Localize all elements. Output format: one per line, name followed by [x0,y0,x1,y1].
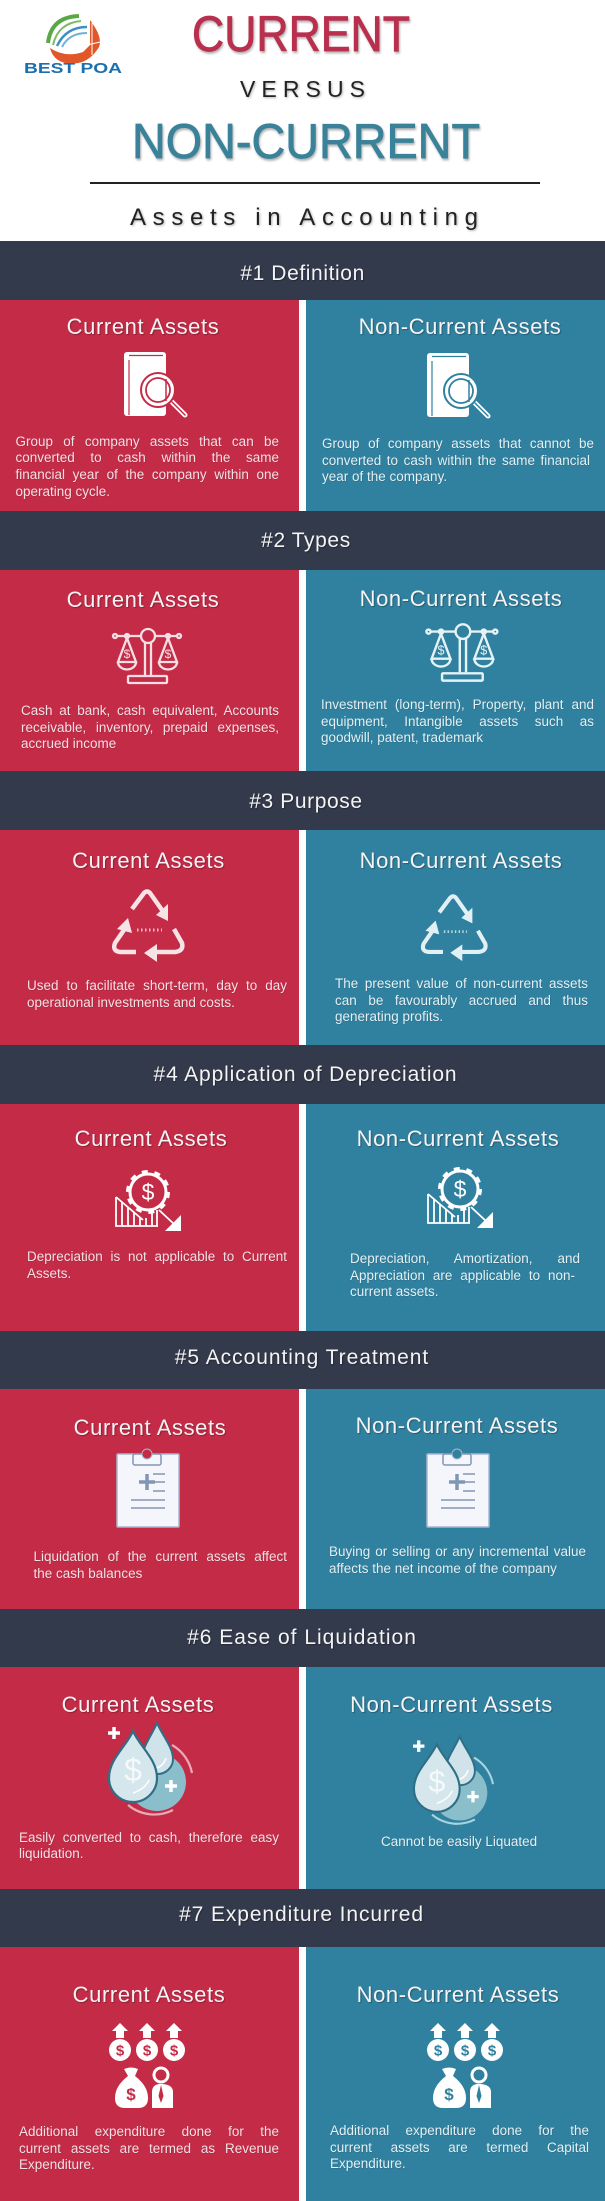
text [27,1249,288,1281]
icon: money bags and investor: $ [126,2085,136,2104]
panel: current assets expenditure [0,1947,299,2201]
text: Cannot be easily Liquated [381,1834,537,1849]
text: operational investments and costs. [27,995,235,1010]
panel: non-current assets expenditure [306,1947,605,2201]
panel: current assets purpose [0,830,299,1045]
text [34,1549,288,1581]
title: versus: VERSUS [240,76,365,102]
text: operating cycle. [16,484,110,499]
heading: Current Assets [67,587,219,612]
text: Appreciation are applicable to non- [350,1268,575,1283]
text: can be favourably accrued and thus [335,993,588,1008]
section bar 5: accounting treatment: #5 Accounting Treatment [175,1346,429,1369]
section bar 6: ease of liquidation [0,1609,605,1667]
text: Liquidation of the current assets affect [34,1549,287,1564]
icon: money bags and investor: $ [170,2042,179,2060]
text [21,703,279,751]
icon: depreciation chart and coin gear: $ [454,1176,467,1202]
text: the cash balances [34,1566,142,1581]
heading: Current Assets [74,1415,226,1440]
icon: scales: $ [480,644,487,658]
text: converted to cash within the same [16,450,279,465]
icon: recycle arrows [112,889,185,962]
text: The present value of non-current assets [335,976,588,991]
panel: non-current assets types [306,570,605,771]
icon: scales [112,628,182,684]
logo: Best POA: BEST POA [24,60,122,77]
text: Expenditure. [19,2157,95,2172]
icon: money bags and investor: $ [434,2042,443,2060]
text: current assets. [350,1284,439,1299]
text: Additional expenditure done for the [330,2123,589,2138]
text [19,1830,280,1862]
icon: money bags and investor: $ [461,2042,470,2060]
heading: Non-Current Assets [350,1692,553,1717]
heading: Current Assets [62,1692,214,1717]
panel: current assets types [0,570,299,771]
panel: non-current assets definition [306,300,605,511]
panel: current assets depreciation [0,1104,299,1331]
heading: Non-Current Assets [360,848,562,873]
text: Investment (long-term), Property, plant and [321,697,594,712]
icon: money bags and investor: $ [488,2042,497,2060]
text: Assets. [27,1266,71,1281]
icon: clipboard [426,1448,490,1528]
icon: money bags and investor [109,2023,185,2108]
text: Expenditure. [330,2156,406,2171]
text [321,697,594,746]
text: Easily converted to cash, therefore easy [19,1830,279,1844]
panel: current assets definition [0,300,299,511]
text [19,2124,279,2172]
title: current: CURRENT [192,6,410,62]
text: goodwill, patent, trademark [321,730,483,745]
section bar 3: purpose [0,771,605,830]
section bar 1: definition [0,241,605,300]
text [335,976,588,1024]
icon: money bags and investor: $ [143,2042,152,2060]
text: Depreciation, Amortization, and [350,1251,580,1266]
panel: non-current assets depreciation [306,1104,605,1331]
text: current assets are termed Capital [330,2140,589,2155]
panel: current assets liquidation [0,1667,299,1889]
heading: Non-Current Assets [359,314,561,339]
text: affects the net income of the company [329,1561,557,1576]
section bar 2: types: #2 Types [261,529,351,552]
header [24,6,540,232]
icon: money drops [413,1734,494,1825]
text: financial year of the company within one [16,467,279,482]
text: receivable, inventory, prepaid expenses, [21,720,279,735]
heading: Non-Current Assets [357,1982,559,2007]
text: Depreciation is not applicable to Current [27,1249,287,1264]
icon: scales: $ [165,647,172,661]
section bar 4: application of depreciation [0,1045,605,1104]
panel: non-current assets accounting treatment [306,1389,605,1609]
icon: depreciation chart and coin gear [427,1167,493,1228]
heading: Non-Current Assets [356,1413,558,1438]
icon: money drops [108,1720,193,1816]
text [330,2123,589,2172]
icon: money drops: $ [124,1752,142,1788]
icon: depreciation chart and coin gear: $ [142,1179,155,1205]
section bar 1: definition: #1 Definition [240,262,365,285]
icon: book and magnifier [427,353,490,418]
icon: money bags and investor: $ [116,2042,125,2060]
text [350,1251,580,1299]
heading: Current Assets [75,1126,227,1151]
section bar 7: expenditure incurred [0,1889,605,1947]
icon: book and magnifier [124,352,188,418]
panel: non-current assets liquidation [306,1667,605,1889]
logo: Best POA [24,16,122,77]
text: Group of company assets that can be [16,434,279,449]
icon: scales: $ [438,644,445,658]
text: Used to facilitate short-term, day to day [27,978,287,993]
text [322,436,594,484]
text: liquidation. [19,1846,84,1861]
heading: Current Assets [72,848,225,873]
text [27,978,288,1010]
panel: non-current assets purpose [306,830,605,1045]
text [16,434,279,500]
text: generating profits. [335,1009,443,1024]
text: accrued income [21,736,116,751]
text: Cash at bank, cash equivalent, Accounts [21,703,279,718]
icon: depreciation chart and coin gear [115,1170,181,1231]
section bar 3: purpose: #3 Purpose [249,790,363,812]
subtitle: Assets in Accounting [130,204,478,231]
icon: scales: $ [124,647,131,661]
section bar 5: accounting treatment [0,1331,605,1389]
text: equipment, Intangible assets such as [321,714,594,729]
heading: Current Assets [73,1982,225,2007]
text [329,1544,586,1576]
section bar 4: application of depreciation: #4 Application of Depreciation [154,1063,457,1086]
heading: Non-Current Assets [360,586,562,611]
icon: money drops: $ [428,1765,445,1799]
icon: scales [425,623,498,682]
text: Additional expenditure done for the [19,2124,279,2139]
text: converted to cash within the same financial [322,453,590,468]
icon: money bags and investor: $ [444,2085,454,2104]
text: current assets are termed as Revenue [19,2141,279,2156]
panel: current assets accounting treatment [0,1389,299,1609]
text: Group of company assets that cannot be [322,436,594,451]
heading: Non-Current Assets [357,1126,559,1151]
title: non-current: NON-CURRENT [132,115,480,169]
section bar 6: ease of liquidation: #6 Ease of Liquidation [187,1626,417,1649]
icon: recycle arrows [420,894,488,961]
icon: money bags and investor [427,2023,503,2108]
heading: Current Assets [67,314,219,339]
icon: clipboard [116,1448,180,1528]
text: year of the company. [322,469,447,484]
section bar 7: expenditure incurred: #7 Expenditure Incurred [179,1903,424,1926]
section bar 2: types [0,511,605,570]
text: Buying or selling or any incremental value [329,1544,586,1559]
